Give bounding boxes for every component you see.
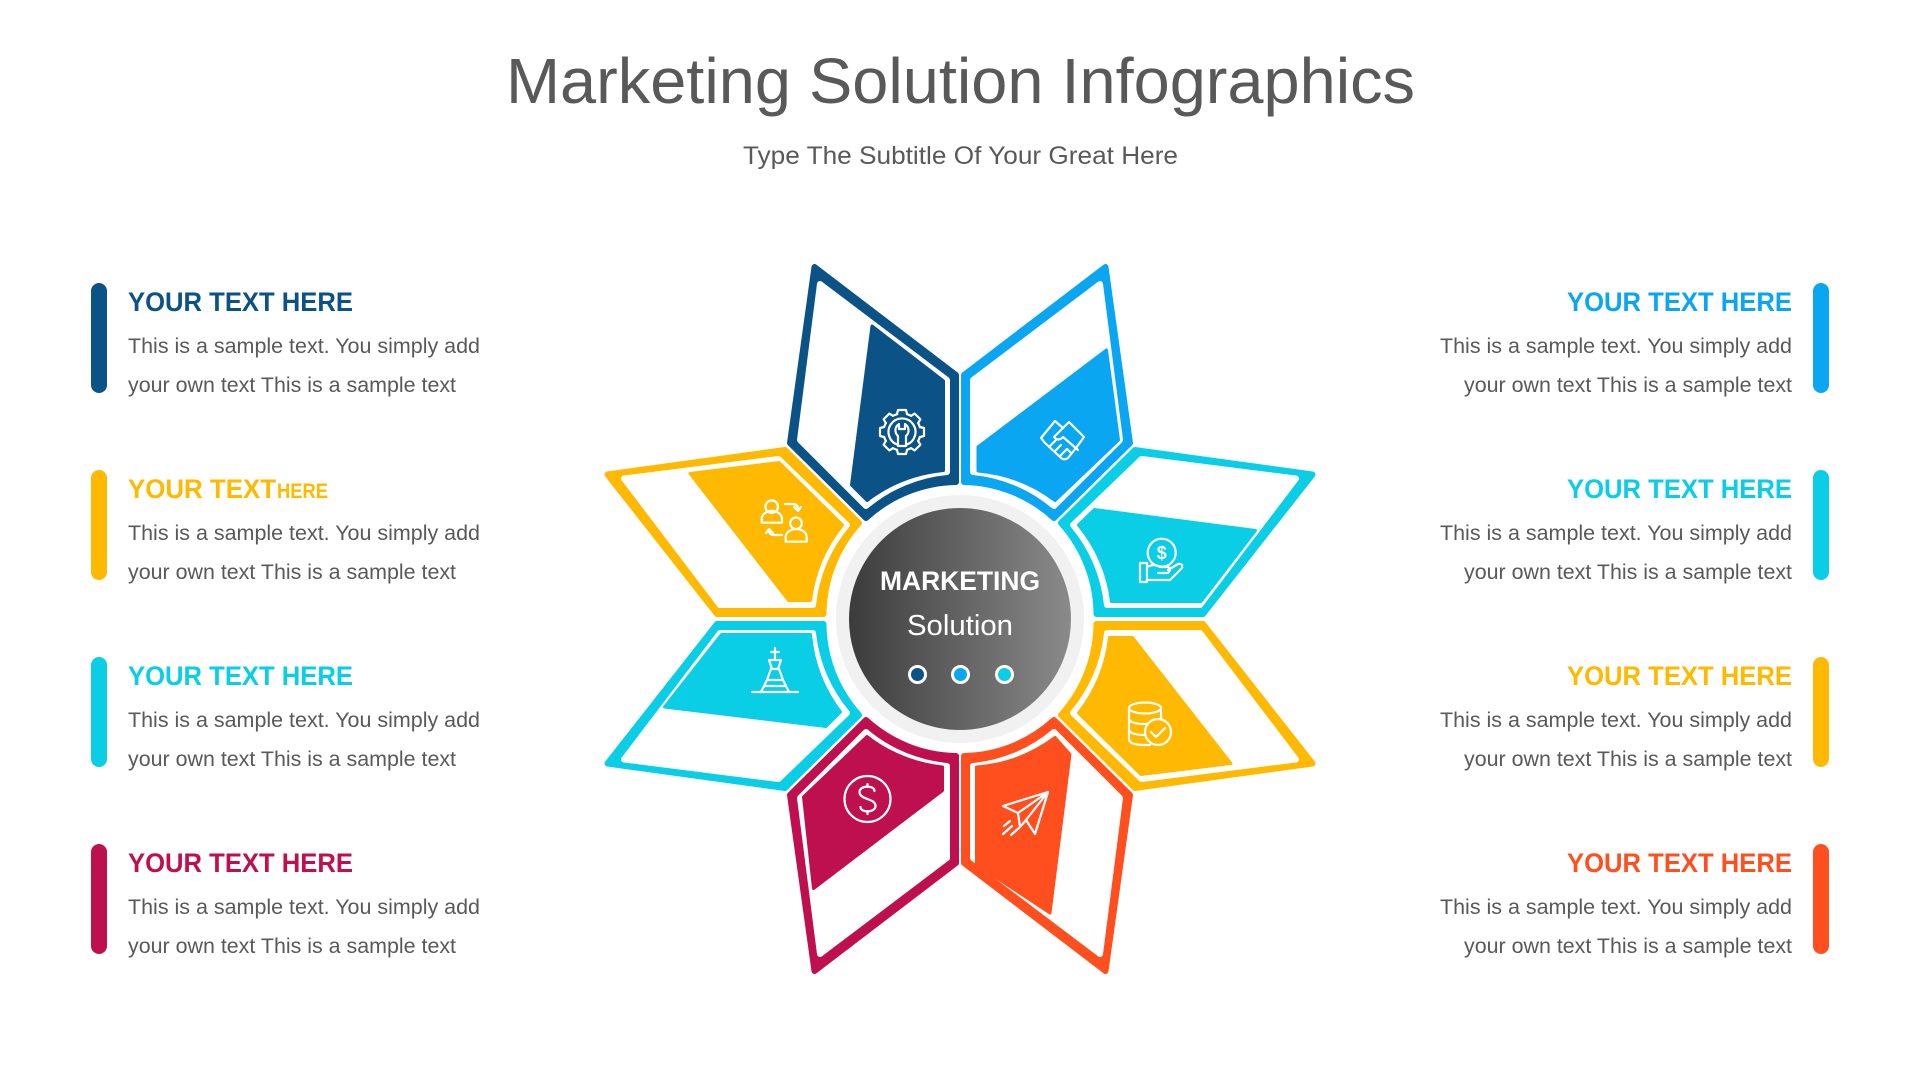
icon: paper plane [1003, 792, 1048, 835]
icon: people exchange [762, 500, 807, 542]
right text block 4: your own text This is a sample text [1464, 935, 1792, 958]
icon: hand holding coin [1140, 539, 1182, 582]
right text block 2: YOUR TEXT HERE [1567, 474, 1792, 504]
left text block 2: YOUR TEXT [128, 474, 276, 504]
left text block 1: This is a sample text. You simply add [128, 335, 480, 358]
left text block 1: your own text This is a sample text [128, 374, 456, 397]
petal: cyan upper-right [1061, 450, 1312, 614]
right text block 3 [1440, 657, 1829, 771]
left text block 1: YOUR TEXT HERE [128, 287, 353, 317]
left text block 3: your own text This is a sample text [128, 748, 456, 771]
petal: dark blue top-left [790, 267, 956, 518]
left text block 3: This is a sample text. You simply add [128, 709, 480, 732]
icon: dollar sign on coin: $ [1157, 543, 1167, 563]
left text block 4: your own text This is a sample text [128, 935, 456, 958]
left text block 2 [91, 470, 480, 584]
right text block 1: YOUR TEXT HERE [1567, 287, 1792, 317]
right text block 4: YOUR TEXT HERE [1567, 848, 1792, 878]
center circle: MARKETING [880, 566, 1040, 596]
icon: dollar circle [844, 776, 890, 822]
right text block 4: This is a sample text. You simply add [1440, 896, 1792, 919]
left text block 2: your own text This is a sample text [128, 561, 456, 584]
left text block 3: YOUR TEXT HERE [128, 661, 353, 691]
left text block 1 [91, 283, 480, 397]
right text block 2: your own text This is a sample text [1464, 561, 1792, 584]
icon: handshake [1041, 421, 1084, 459]
petal: amber upper-left [608, 450, 859, 614]
petal: cyan lower-left [608, 624, 859, 788]
center circle [836, 495, 1084, 743]
right text block 1: This is a sample text. You simply add [1440, 335, 1792, 358]
right text block 1: your own text This is a sample text [1464, 374, 1792, 397]
indicator dots [910, 666, 1012, 682]
petal: amber lower-right [1061, 624, 1312, 788]
left text block 4: This is a sample text. You simply add [128, 896, 480, 919]
left text block 3 [91, 657, 480, 771]
right text block 3: YOUR TEXT HERE [1567, 661, 1792, 691]
icon: database check [1129, 702, 1171, 745]
right text block 3: This is a sample text. You simply add [1440, 709, 1792, 732]
right text block 3: your own text This is a sample text [1464, 748, 1792, 771]
subtitle: Type The Subtitle Of Your Great Here [743, 142, 1178, 170]
left text block 2: This is a sample text. You simply add [128, 522, 480, 545]
left text block 4: YOUR TEXT HERE [128, 848, 353, 878]
title: Marketing Solution Infographics [506, 45, 1415, 117]
petal: orange bottom-right [964, 720, 1130, 971]
center circle: Solution [907, 610, 1013, 642]
right text block 2: This is a sample text. You simply add [1440, 522, 1792, 545]
left text block 2: HERE [277, 480, 328, 503]
petal: sky blue top-right [964, 267, 1130, 518]
right text block 1 [1440, 283, 1829, 397]
icon: gear with wrench [880, 410, 924, 454]
left text block 4 [91, 844, 480, 958]
right text block 2 [1440, 470, 1829, 584]
right text block 4 [1440, 844, 1829, 958]
petal: crimson bottom-left [790, 720, 956, 971]
icon: chess king [752, 648, 798, 692]
